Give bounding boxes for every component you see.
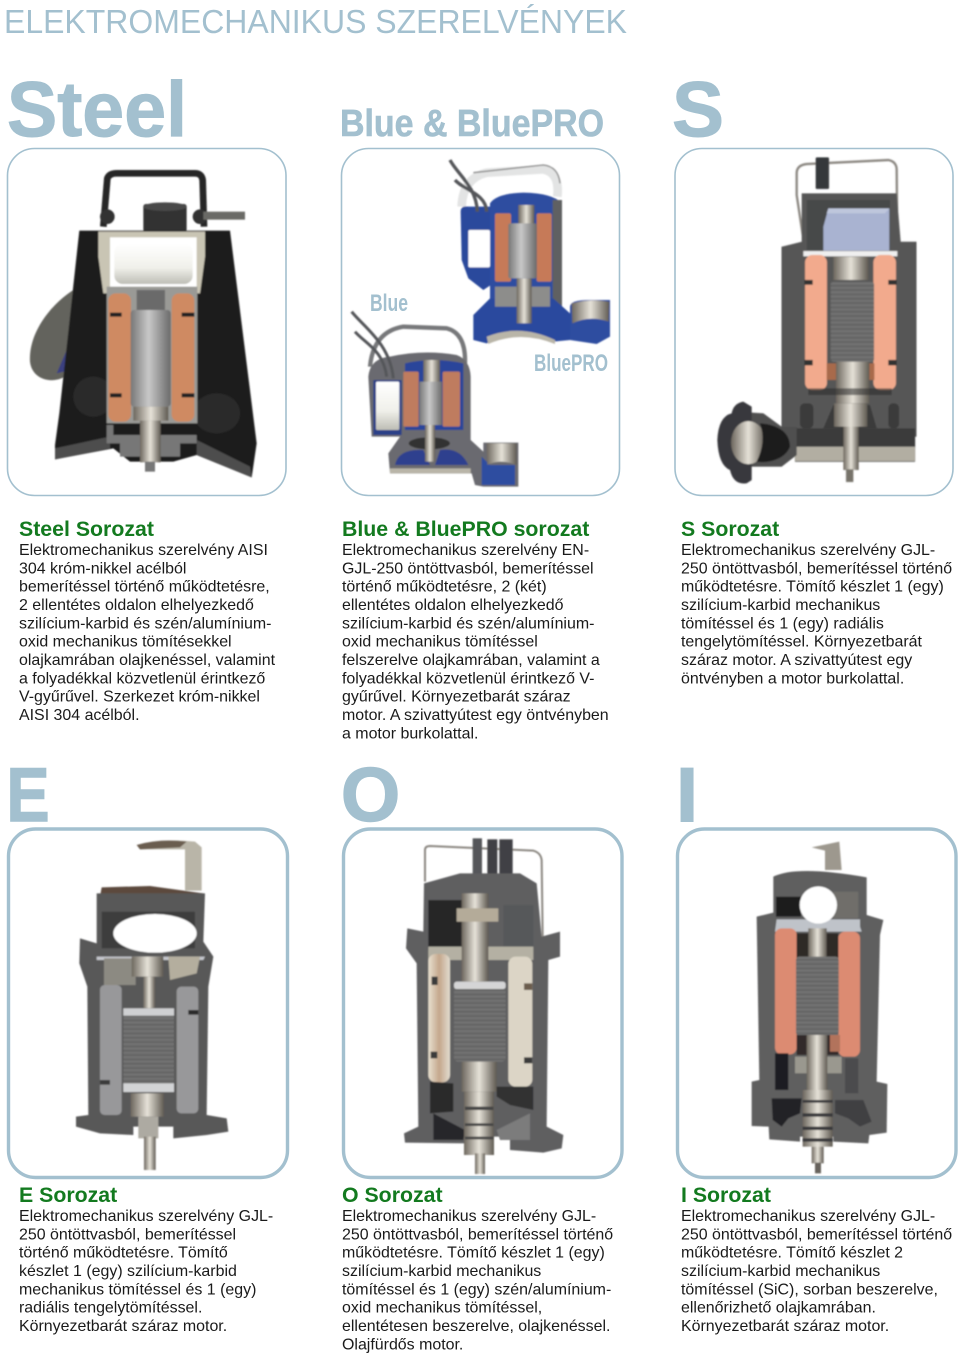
description: folyadékkal közvetlenül érintkező V-: [342, 670, 594, 687]
description: radiális tengelytömítéssel.: [19, 1300, 202, 1317]
panel: Steel: [8, 148, 286, 496]
description: tömítéssel és 1 (egy) szén/alumínium-: [342, 1281, 611, 1298]
illustration: E pump cutaway: [76, 841, 228, 1170]
description: oxid mechanikus tömítéssel: [342, 634, 538, 651]
description: ellentétesen beszerelve, olajkenéssel.: [342, 1318, 610, 1335]
label: BluePRO: BluePRO: [534, 350, 608, 377]
panel: Blue & BluePRO: [342, 148, 620, 496]
description: bemerítéssel történő működtetésre,: [19, 579, 270, 596]
description: szilícium-karbid mechanikus: [681, 1263, 880, 1280]
illustration: I pump cutaway: [752, 842, 887, 1173]
description: 250 öntöttvasból, bemerítéssel történő: [342, 1226, 613, 1243]
heading: S Sorozat: [681, 517, 779, 541]
description: oxid mechanikus tömítésekkel: [19, 634, 232, 651]
description: Olajfürdős motor.: [342, 1336, 463, 1353]
illustration: Blue pump cutaway: [352, 312, 518, 487]
description: a folyadékkal közvetlenül érintkező: [19, 670, 265, 687]
description: szilícium-karbid és szén/alumínium-: [19, 615, 271, 632]
panel: S: [675, 148, 953, 496]
heading: S: S: [672, 65, 724, 153]
description: oxid mechanikus tömítéssel,: [342, 1300, 542, 1317]
description: történő működtetésre. Tömítő: [19, 1245, 228, 1262]
description: 304 króm-nikkel acélból: [19, 560, 186, 577]
title: ELEKTROMECHANIKUS SZERELVÉNYEK: [4, 3, 627, 40]
description: Elektromechanikus szerelvény AISI: [19, 542, 268, 559]
heading: I: I: [676, 753, 698, 838]
description: készlet 1 (egy) szilícium-karbid: [19, 1263, 237, 1280]
text block: E Sorozat: [19, 1183, 273, 1335]
heading: O Sorozat: [342, 1183, 443, 1207]
description: Környezetbarát száraz motor.: [681, 1318, 889, 1335]
description: 250 öntöttvasból, bemerítéssel történő: [681, 560, 952, 577]
heading: O: O: [341, 753, 400, 838]
panel frame: [8, 829, 288, 1178]
description: működtetésre. Tömítő készlet 2: [681, 1245, 903, 1262]
description: Elektromechanikus szerelvény GJL-: [681, 1208, 935, 1225]
heading: Steel Sorozat: [19, 517, 154, 541]
description: tengelytömítéssel. Környezetbarát: [681, 634, 923, 651]
description: tömítéssel (SiC), sorban beszerelve,: [681, 1281, 938, 1298]
description: olajkamrában olajkenéssel, valamint: [19, 652, 276, 669]
description: V-gyűrűvel. Szerkezet króm-nikkel: [19, 689, 260, 706]
description: Elektromechanikus szerelvény EN-: [342, 542, 589, 559]
panel: I: [678, 829, 956, 1178]
description: Elektromechanikus szerelvény GJL-: [681, 542, 935, 559]
description: történő működtetésre, 2 (két): [342, 579, 547, 596]
description: Elektromechanikus szerelvény GJL-: [19, 1208, 273, 1225]
text block: Blue & BluePRO sorozat: [342, 517, 609, 742]
description: motor. A szivattyútest egy öntvényben: [342, 707, 609, 724]
panel: O: [344, 829, 622, 1178]
description: öntvényben a motor burkolattal.: [681, 670, 904, 687]
description: Elektromechanikus szerelvény GJL-: [342, 1208, 596, 1225]
description: ellentétes oldalon elhelyezkedő: [342, 597, 564, 614]
description: 250 öntöttvasból, bemerítéssel történő: [681, 1226, 952, 1243]
text block: Steel Sorozat: [19, 517, 276, 724]
illustration: Steel pump cutaway: [30, 173, 257, 477]
heading: Steel: Steel: [7, 65, 187, 153]
text block: I Sorozat: [681, 1183, 952, 1335]
text block: O Sorozat: [342, 1183, 613, 1353]
description: AISI 304 acélból.: [19, 707, 140, 724]
description: mechanikus tömítéssel és 1 (egy): [19, 1281, 256, 1298]
panel frame: [342, 148, 620, 496]
description: szilícium-karbid mechanikus: [342, 1263, 541, 1280]
heading: I Sorozat: [681, 1183, 771, 1207]
panel frame: [675, 148, 953, 496]
heading: Blue & BluePRO: Blue & BluePRO: [340, 103, 604, 145]
illustration: BluePRO pump cutaway: [450, 160, 610, 344]
illustration: O pump cutaway: [404, 838, 563, 1174]
heading: E: E: [6, 753, 50, 838]
description: a motor burkolattal.: [342, 725, 478, 742]
description: száraz motor. A szivattyútest egy: [681, 652, 912, 669]
description: GJL-250 öntöttvasból, bemerítéssel: [342, 560, 594, 577]
description: 2 ellentétes oldalon elhelyezkedő: [19, 597, 254, 614]
description: szilícium-karbid és szén/alumínium-: [342, 615, 594, 632]
description: szilícium-karbid mechanikus: [681, 597, 880, 614]
panel frame: [8, 148, 286, 496]
text block: S Sorozat: [681, 517, 952, 687]
description: 250 öntöttvasból, bemerítéssel: [19, 1226, 236, 1243]
description: gyűrűvel. Környezetbarát száraz: [342, 689, 571, 706]
description: felszerelve olajkamrában, valamint a: [342, 652, 600, 669]
description: működtetésre. Tömítő készlet 1 (egy): [342, 1245, 605, 1262]
description: tömítéssel és 1 (egy) radiális: [681, 615, 884, 632]
description: működtetésre. Tömítő készlet 1 (egy): [681, 579, 944, 596]
description: ellenőrizhető olajkamrában.: [681, 1300, 876, 1317]
panel: E: [8, 829, 288, 1178]
panel frame: [678, 829, 956, 1178]
heading: E Sorozat: [19, 1183, 117, 1207]
description: Környezetbarát száraz motor.: [19, 1318, 227, 1335]
label: Blue: Blue: [370, 290, 408, 317]
panel frame: [344, 829, 622, 1178]
heading: Blue & BluePRO sorozat: [342, 517, 589, 541]
illustration: S pump cutaway: [717, 157, 917, 483]
